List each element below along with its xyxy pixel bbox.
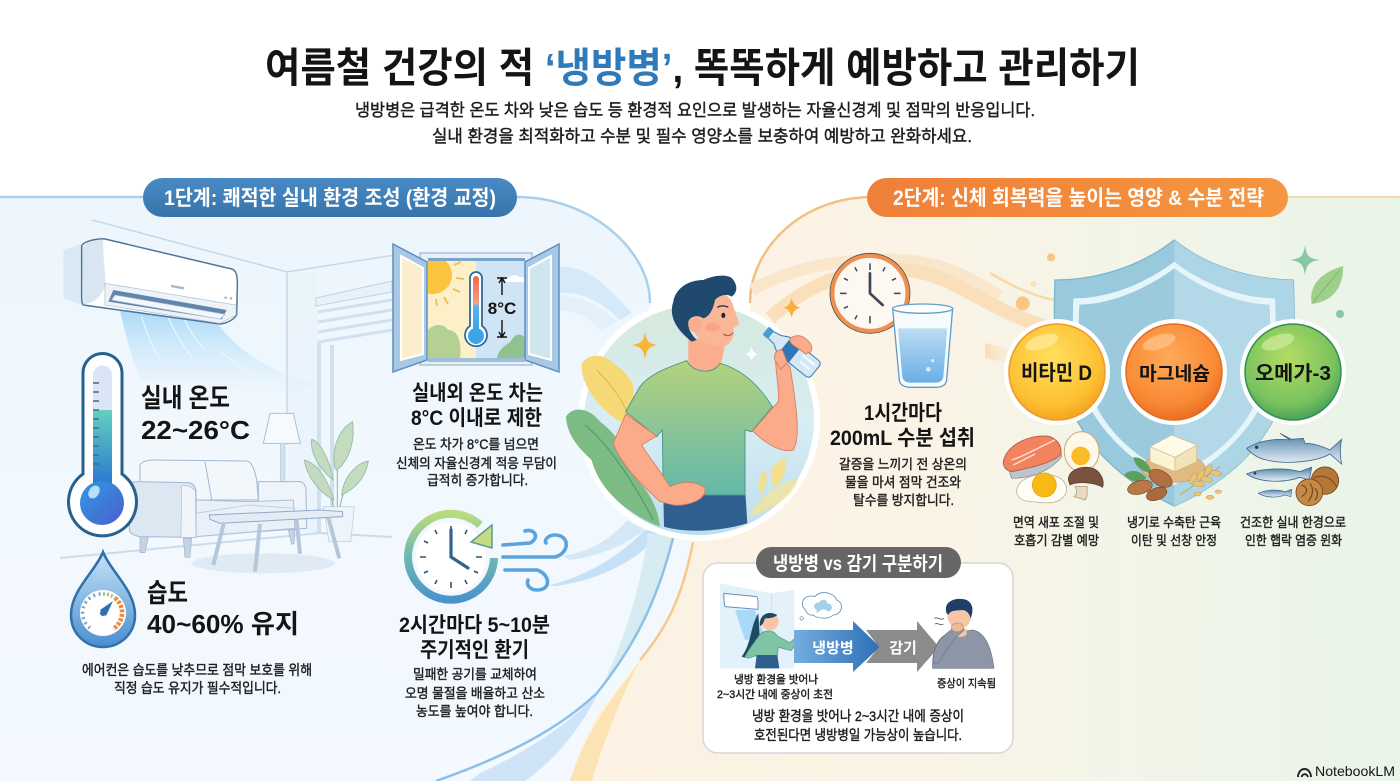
icon: ventilation clock and wind (408, 514, 566, 600)
subtitle: 실내 환경을 최적화하고 수분 및 필수 영양소를 보충하여 예방하고 완화하세요. (432, 127, 972, 146)
text: water intake: 1시간마다 (864, 402, 942, 425)
arrow: cold (866, 621, 939, 672)
text: temperature gap rule: 실내외 온도 차는 (412, 382, 543, 405)
head (672, 276, 739, 347)
nutrient: magnesium (1121, 319, 1227, 425)
text: ventilation: 오명 물절을 배율하고 산소 (405, 686, 545, 701)
illustration: living room (60, 220, 395, 573)
arrow: cooling sickness (794, 621, 880, 672)
text: humidity: 40~60% 유지 (147, 609, 299, 639)
icon: open window with 8°C difference: 8°C (488, 299, 516, 318)
text: humidity (147, 578, 299, 639)
pill: comparison heading (756, 547, 961, 578)
center illustration: man drinking water (566, 276, 822, 541)
text: comparison captions (717, 673, 996, 701)
text: comparison captions: 증상이 지속됨 (937, 677, 996, 690)
nutrient: omega-3 (1240, 319, 1346, 425)
icon: room thermometer (68, 354, 136, 536)
text: temperature gap rule: 급적히 증가합니다. (427, 473, 528, 488)
text: nutrient captions: 인한 햅락 염증 윈화 (1245, 533, 1342, 548)
icon: open window with 8°C difference (393, 244, 559, 372)
text: humidity: 습도 (147, 578, 188, 608)
text: water intake: 갈증을 느끼기 전 상온의 (839, 457, 967, 472)
icon: humidity drop gauge (71, 552, 135, 647)
text: nutrient captions: 면역 새포 조절 및 (1013, 515, 1099, 530)
text: ventilation: 2시간마다 5~10분 (399, 614, 550, 637)
text: ventilation: 밀패한 공기를 교체하여 (413, 667, 537, 682)
text: comparison summary: 호전된다면 냉방병일 가능상이 높습니다. (754, 727, 962, 743)
text: nutrient captions: 냉기로 수축탄 근육 (1127, 515, 1221, 530)
text: comparison summary: 냉방 환경을 밧어나 2~3시간 내에 증상이 (752, 708, 964, 724)
nutrient: omega-3: 오메가-3 (1255, 362, 1331, 385)
text: nutrient captions: 건조한 실내 한경으로 (1240, 515, 1346, 530)
text: ventilation: 농도를 높여야 합니다. (416, 704, 533, 719)
bottle (759, 323, 822, 379)
text: humidity description: 에어컨은 습도를 낮추므로 점막 보호를 위해 (82, 662, 312, 678)
title: 여름철 건강의 적 ‘냉방병’, 똑똑하게 예방하고 관리하기 (265, 45, 1140, 91)
arrow: cooling sickness: 냉방병 (812, 640, 854, 657)
subtitle: 냉방병은 급격한 온도 차와 낮은 습도 등 환경적 요인으로 발생하는 자율신경계 및 점막의 반응입니다. (355, 101, 1035, 120)
text: temperature gap rule (396, 382, 557, 488)
arrow: cold: 감기 (889, 640, 917, 657)
text: water intake: 물을 마셔 점막 건조와 (845, 475, 961, 490)
text: indoor temperature: 실내 온도 (141, 383, 230, 413)
subtitle (355, 101, 1035, 146)
step 1 heading pill: 1단계: 쾌적한 실내 환경 조성 (환경 교정) (164, 187, 496, 210)
fingers (775, 336, 812, 369)
step 2 heading pill (867, 178, 1288, 217)
icon: salmon, eggs, mushroom (1003, 432, 1103, 503)
sparkles (632, 332, 758, 361)
illustration: air conditioner (63, 239, 317, 397)
step 2 heading pill: 2단계: 신체 회복력을 높이는 영양 & 수분 전략 (893, 187, 1264, 210)
text: nutrient captions: 호흡기 감별 예망 (1014, 533, 1099, 548)
text: water intake: 200mL 수분 섭취 (830, 427, 975, 450)
text: nutrient captions: 이탄 및 선창 안정 (1131, 533, 1217, 548)
text: temperature gap rule: 8°C 이내로 제한 (411, 407, 542, 430)
text: water intake: 탈수를 방지합니다. (853, 493, 954, 508)
leaves behind the man (566, 356, 798, 527)
nutrient: vitamin D (1004, 319, 1110, 425)
text: indoor temperature (141, 383, 250, 445)
text: indoor temperature: 22~26°C (141, 415, 250, 445)
illustration: woman in cooled room (720, 583, 841, 668)
icon: tofu, almonds, wheat (1124, 435, 1222, 503)
text: ventilation: 주기적인 환기 (420, 639, 529, 662)
text: comparison summary (752, 708, 964, 743)
nutrient: magnesium: 마그네슘 (1139, 363, 1210, 385)
panel: cooling sickness vs cold (703, 547, 1013, 753)
nutrient: vitamin D: 비타민 D (1021, 362, 1092, 385)
panel: step 2 nutrition and hydration (570, 178, 1400, 781)
text: temperature gap rule: 신체의 자율신경계 적응 무담이 (396, 456, 557, 471)
text: water intake (830, 402, 975, 508)
torso and arms (613, 337, 797, 531)
icon: fish and walnuts (1247, 433, 1342, 506)
text: comparison captions: 2~3시간 내에 중상이 초전 (717, 688, 833, 701)
text: comparison captions: 냉방 환경을 밧어나 (734, 673, 818, 686)
text: ventilation (399, 614, 550, 719)
icon: clock and glass of water (783, 253, 953, 387)
step 1 heading pill (143, 178, 517, 217)
text: humidity description: 직정 습도 유지가 필수적입니다. (114, 680, 281, 696)
text: nutrient captions (1013, 515, 1346, 548)
panel: step 1 indoor environment (0, 178, 693, 781)
pill: comparison heading: 냉방병 vs 감기 구분하기 (773, 553, 943, 575)
illustration: man coughing (933, 599, 994, 668)
icon: nutrient shield (1016, 240, 1344, 506)
text: temperature gap rule: 온도 차가 8°C를 넘으면 (413, 437, 539, 452)
logo: NotebookLM: NotebookLM (1315, 763, 1395, 779)
text: humidity description (82, 662, 312, 696)
